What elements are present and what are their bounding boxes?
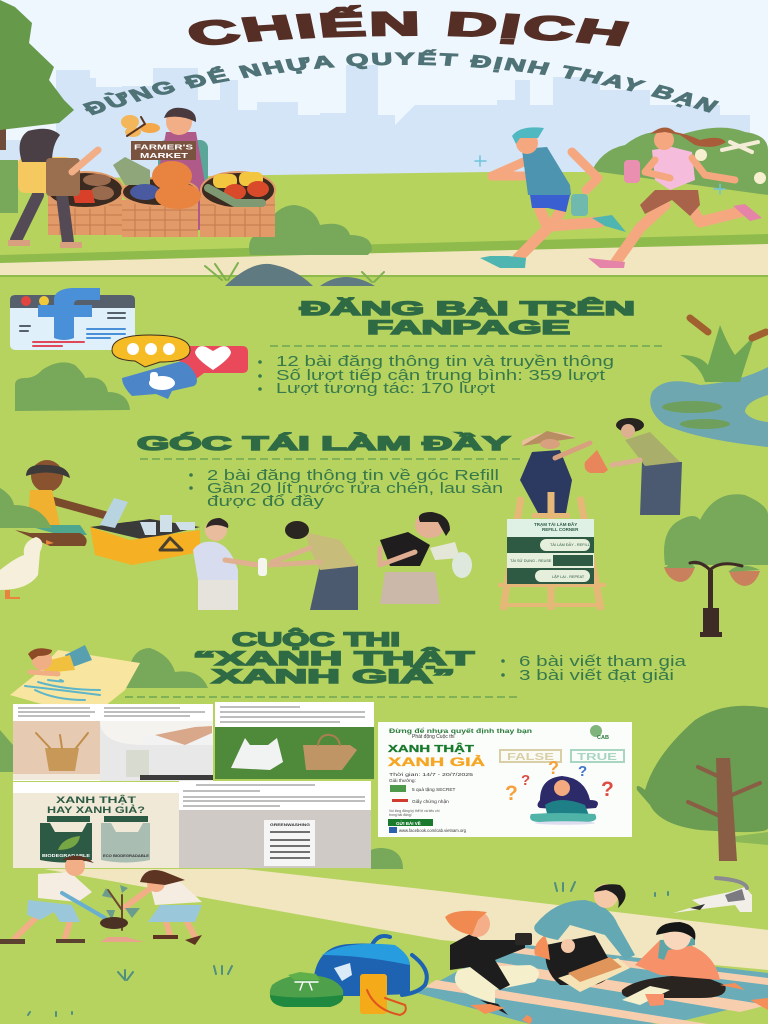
icon: reaction bubbles	[112, 335, 248, 399]
thinking girl with question marks: ?	[548, 758, 559, 778]
illustration: boy recycling with goose	[0, 460, 200, 599]
post: greenwashing	[179, 781, 371, 868]
icon: CAB logo	[590, 725, 609, 741]
heading	[300, 298, 635, 339]
bullet list	[501, 653, 687, 684]
panel: contest entry posts	[13, 702, 374, 868]
panel: contest poster: trong bài đăng!	[389, 813, 412, 817]
photo: woman in conical hat	[520, 431, 590, 513]
poster text: TRẠM TÁI LÀM ĐẦY	[534, 521, 577, 527]
seller	[155, 108, 208, 230]
skyline	[0, 65, 750, 180]
photo: woman receiving refill	[193, 518, 267, 610]
panel: contest poster: Giải thưởng:	[389, 777, 416, 784]
bush behind market	[249, 205, 372, 255]
title: CHIẾN DỊCH	[188, 4, 630, 46]
heading	[193, 629, 475, 688]
illustration: grass tufts	[28, 882, 668, 1016]
panel: contest poster: Vui lòng đăng ký thể lệ và tiêu chí	[389, 809, 440, 813]
bush behind contest heading	[115, 648, 208, 688]
false and true boxes: TRUE	[577, 752, 617, 763]
panel: fanpage posts	[10, 288, 665, 399]
poster text: LẶP LẠI - REPEAT	[552, 575, 585, 579]
heading: CUỘC THI	[232, 629, 400, 651]
post: paper cup	[13, 704, 100, 781]
bullet list	[258, 353, 614, 397]
heading: “XANH THẬT	[193, 648, 475, 670]
watermelon bag	[270, 972, 343, 1007]
lower park path	[44, 869, 768, 970]
icon: CAB logo: CAB	[597, 735, 609, 741]
vegetables	[72, 157, 269, 209]
illustration: stretching cat	[673, 878, 752, 913]
illustration: child writing on paper	[10, 645, 140, 706]
bush right of easel	[664, 494, 768, 565]
heading: XANH GIẢ”	[212, 666, 455, 688]
easel with refill corner poster	[498, 492, 606, 610]
post: refill bottle	[100, 704, 213, 781]
bullet list: 2 bài đăng thông tin về góc Refill	[207, 467, 499, 484]
distant bushes	[590, 128, 768, 210]
panel: contest poster: GỬI BÀI VỀ	[396, 820, 421, 826]
bullet list: 12 bài đăng thông tin và truyền thông	[276, 353, 614, 370]
rocks and grass tufts on the path	[205, 263, 384, 286]
grass	[0, 172, 768, 262]
post: xanh that hay xanh gia: HAY XANH GIẢ?	[47, 804, 145, 816]
heading: ĐĂNG BÀI TRÊN	[300, 298, 635, 320]
icon: butterfly	[121, 115, 160, 137]
panel: contest poster: XANH GIẢ	[388, 756, 485, 769]
panel: contest poster: Giấy chứng nhận	[412, 799, 449, 805]
poster text: REFILL CORNER	[542, 527, 579, 532]
bullet list	[189, 467, 503, 510]
photo: orange refill jug	[585, 450, 608, 473]
panel: contest poster: XANH THẬT	[388, 742, 475, 755]
illustration: woman in orange sweater	[622, 922, 726, 1006]
icon: street lamp with flower pots	[664, 561, 760, 637]
post: plastic and paper bag	[215, 702, 374, 779]
market sign	[131, 141, 196, 160]
boy	[0, 856, 105, 944]
sapling	[100, 885, 140, 930]
bullet list: Lượt tương tác: 170 lượt	[276, 380, 496, 397]
illustration: running man	[480, 127, 626, 268]
photo: woman pouring refill	[270, 521, 358, 610]
thinking girl with question marks: ?	[521, 772, 530, 789]
bullet list: được đổ đầy	[207, 493, 325, 510]
recycling box	[90, 498, 200, 565]
bullet list: 6 bài viết tham gia	[519, 653, 687, 670]
market sign: MARKET	[140, 151, 189, 160]
illustration: picnic backpack and bags	[270, 936, 427, 1015]
heading: GÓC TÁI LÀM ĐẦY	[137, 433, 511, 455]
illustration: man with red hair on blanket	[445, 911, 539, 1015]
panel: sky and park background	[0, 0, 768, 277]
yellow bottle bag	[360, 974, 406, 1015]
post: xanh that hay xanh gia: XANH THẬT	[56, 794, 136, 806]
thinking girl with question marks: ?	[601, 778, 614, 801]
thinking girl with question marks: ?	[578, 763, 587, 780]
post: greenwashing: GREENWASHING	[270, 823, 310, 827]
thinking girl with question marks: ?	[505, 782, 518, 805]
backpack	[313, 936, 427, 996]
photo: woman handing refill	[612, 418, 682, 515]
panel: contest poster: www.facebook.com/cab.vietnam.org	[399, 828, 466, 833]
panel: contest poster: Đừng để nhựa quyết định thay bạn	[389, 727, 532, 735]
heading: FANPAGE	[367, 318, 570, 339]
false and true boxes	[500, 750, 624, 763]
illustration: farmer's market	[8, 108, 275, 248]
illustration: woman in teal sweater	[534, 884, 635, 985]
bullet list: Gần 20 lít nước rửa chén, lau sàn	[207, 480, 503, 497]
panel: contest poster: 5 quà tặng SECRET	[412, 787, 456, 793]
icon: big tree right	[637, 706, 768, 861]
icon: facebook window	[10, 288, 135, 350]
icon: sparkles	[475, 156, 725, 194]
bush beside fanpage	[15, 362, 130, 411]
icon: pine tree top left	[0, 0, 74, 150]
photo: woman holding jug	[380, 512, 472, 604]
illustration: running woman	[588, 127, 766, 268]
illustration: sandwich tray	[558, 957, 630, 992]
panel: refill corner	[137, 433, 520, 510]
panel: contest poster: Thời gian: 14/7 - 20/7/2025	[389, 772, 473, 778]
illustration: children planting tree	[0, 856, 202, 945]
bullet list: 3 bài viết đạt giải	[519, 667, 674, 684]
false and true boxes: FALSE	[507, 752, 554, 763]
subtitle: ĐỪNG ĐỂ NHỰA QUYẾT ĐỊNH THAY BẠN	[82, 49, 720, 116]
poster text	[510, 521, 590, 579]
panel: contest poster	[378, 722, 632, 837]
post: xanh that hay xanh gia	[13, 782, 179, 868]
market sign: FARMER'S	[134, 142, 193, 152]
poster text: TÁI LÀM ĐẦY - REFILL	[550, 543, 590, 547]
illustration: picnic blanket	[417, 943, 768, 1024]
girl	[125, 870, 202, 945]
post: xanh that hay xanh gia: BIODEGRADABLE	[42, 853, 90, 858]
path	[0, 244, 768, 275]
panel: contest poster: Phát động Cuộc thi	[412, 734, 455, 740]
thinking girl with question marks	[505, 758, 614, 825]
illustration: pond with reeds	[650, 318, 768, 447]
baskets	[47, 172, 275, 237]
bushes lower	[0, 730, 403, 869]
bullet list: Số lượt tiếp cận trung bình: 359 lượt	[276, 367, 606, 384]
illustration: autumn leaves	[470, 983, 768, 1024]
poster text: TÁI SỬ DỤNG - REUSE	[510, 558, 552, 563]
post: xanh that hay xanh gia: ECO BIODEGRADABLE	[103, 853, 149, 858]
dragonfly and flowers	[695, 142, 766, 184]
shopper	[8, 129, 98, 248]
panel: contest	[125, 629, 687, 697]
goose	[0, 537, 54, 599]
